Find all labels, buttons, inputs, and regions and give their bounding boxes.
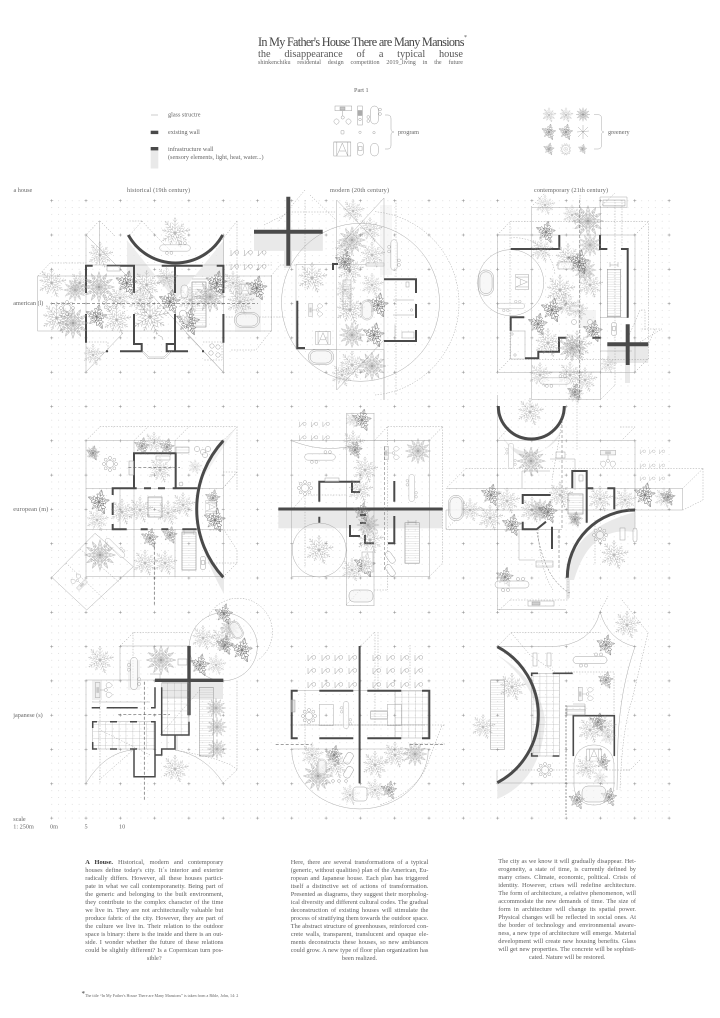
text column 1: the generic and belonging to the built environment, [85, 891, 223, 898]
plants [301, 742, 427, 805]
text column 2: The abstract structure of greenhouses, reinforced con- [291, 923, 428, 930]
central infrastructure wall [359, 646, 361, 783]
axis arrow [52, 302, 258, 304]
text column 3: form in architecture will change its spatial power. [498, 906, 636, 912]
plan: european modern [278, 408, 443, 605]
infrastructure shading [497, 655, 545, 799]
text column 3: identity. However, crises will redefine architecture. [498, 882, 636, 888]
plants [472, 611, 641, 810]
plan: american modern [254, 190, 459, 400]
scale: scale [13, 816, 26, 823]
text column 1: side. I wonder whether the future of these relations [85, 939, 223, 946]
plants [85, 432, 226, 576]
text column 3: ness, a new type of architecture will emerge. Material [498, 930, 636, 936]
axis line [559, 415, 562, 570]
text column 3: The form of architecture, a relative phenomenon, will [498, 890, 636, 896]
glass structure lines [86, 598, 272, 783]
furniture [478, 200, 625, 387]
column heading: historical: historical (19th century) [127, 187, 190, 194]
plants [527, 195, 617, 404]
furniture [60, 242, 260, 357]
scale: 1: 250m [13, 824, 34, 830]
cross infrastructure wall [254, 197, 323, 266]
text column 2: (generic, without qualities) plan of the American, Eu- [291, 867, 428, 874]
chairs [300, 422, 329, 440]
chairs [640, 450, 665, 481]
text column 3: accommodate the new demands of time. The size of [498, 898, 636, 904]
text column 3: erogeneity, a state of time, is currently defined by [498, 866, 636, 872]
background dot grid [50, 199, 671, 820]
arched wall [128, 235, 223, 263]
existing walls [297, 264, 416, 348]
text column 2: deconstruction of existing houses will stimulate the [291, 907, 428, 914]
legend: infrastructure wall [151, 146, 264, 168]
plants [459, 398, 676, 588]
footnote asterisk on title: * [464, 35, 467, 41]
plan: american historical [38, 218, 323, 372]
tile floors [93, 683, 189, 749]
axis arrows [118, 682, 170, 800]
glass structure lines [478, 193, 662, 400]
text column 1: produce fabric of the city. However, they are part of [85, 915, 223, 922]
existing walls [319, 481, 394, 543]
existing walls [523, 471, 614, 549]
glass structure lines [292, 413, 443, 605]
axis line [384, 447, 386, 570]
legend: glass structure: glass structre [168, 111, 201, 118]
plants [306, 408, 431, 582]
arched infrastructure wall [497, 647, 538, 783]
footnote: *The title “In My Father's House There are Many Mansions” is taken from a Bible, John, 14: 2 [82, 990, 238, 998]
text column 3: Physical changes will be reflected in social ones. At [498, 914, 636, 920]
row/column heading: a house: a house [14, 187, 32, 194]
competition line: shinkenchiku residental design competition 2019_living in the future [258, 60, 463, 66]
column heading: contemporary: contemporary (21th century) [534, 187, 608, 194]
text column 3: development will create new housing benefits. Glass [498, 938, 636, 944]
plan: japanese modern [276, 632, 445, 809]
furniture [291, 700, 387, 801]
plan: japanese contemporary [472, 596, 648, 815]
existing walls [92, 687, 189, 777]
text column 2: been realized. [342, 955, 377, 962]
row heading: japanese: japanese (s) [12, 712, 43, 719]
scale: 0m [50, 824, 58, 830]
existing walls [511, 235, 628, 358]
part label: Part 1 [354, 87, 369, 94]
text column 2 [290, 859, 428, 962]
plants [38, 218, 268, 366]
existing walls [532, 673, 614, 756]
axis line [579, 200, 581, 400]
infrastructure shading [278, 510, 443, 528]
text column 1: sible? [147, 955, 162, 962]
plan: japanese historical [86, 598, 272, 800]
text column 1: A House. Historical, modern and contemporary [85, 859, 223, 866]
furniture [69, 446, 216, 590]
existing walls [86, 266, 223, 351]
axis arrows [276, 743, 445, 745]
plants [87, 603, 253, 783]
glass structure lines [497, 596, 648, 805]
column heading: modern: modern (20th century) [330, 187, 389, 194]
text column 1: pate in what we call contemporaneity. Being part of [85, 883, 223, 890]
glass structure lines [52, 427, 237, 610]
text column 2: Presented as diagrams, they suggest their morpholog- [291, 891, 428, 898]
furniture [491, 653, 607, 802]
text column 1: the culture we live in. Their relation to the outdoor [85, 923, 223, 930]
infrastructure shading [92, 660, 223, 700]
row heading: european: european (m) [13, 506, 48, 513]
legend: infrastructure wall: infrastructure wall [168, 146, 214, 153]
plan: european historical [52, 427, 237, 610]
text column 2: ropean and Japanese house. Each plan has triggered [291, 875, 428, 882]
text column 2: Here, there are several transformations of a typical [291, 859, 428, 866]
text column 2: process of stratifying them towards the outdoor space. [291, 915, 428, 922]
text column 1: space is binary: there is the inside and there is an out- [85, 931, 223, 938]
subtitle: the disappearance of a typical house [258, 49, 463, 60]
scale [13, 816, 125, 830]
scale: 5 [84, 824, 88, 830]
text column 2: ical diversity and different cultural codes. The gradual [291, 899, 428, 906]
text column 2: could grow. A new type of floor plan organization has [291, 947, 428, 954]
infrastructure shading [127, 232, 323, 332]
legend [151, 111, 264, 168]
tile floor [395, 691, 428, 738]
greenery label: greenery [608, 129, 631, 136]
program label: program [398, 129, 419, 136]
text column 2: ments deconstructs these houses, so new ambiances [291, 939, 428, 946]
title block [258, 35, 464, 66]
plants [298, 199, 389, 387]
legend: program icons [334, 106, 394, 156]
axis line [565, 705, 567, 815]
chairs [308, 655, 423, 688]
text column 2: itself a distinctive set of actions of transformation. [291, 883, 428, 890]
text column 1 [85, 859, 224, 962]
text column 1: we live in. They are not architecturally valuable but [85, 907, 223, 914]
curved infrastructure wall [197, 441, 223, 577]
quarter arc wall [567, 510, 635, 578]
text column 3: cated. Nature will be restored. [529, 954, 605, 960]
glass structure lines [38, 221, 297, 372]
text column 2: crete walls, transparent, translucent and opaque ele- [291, 931, 428, 938]
infrastructure shading [498, 425, 635, 598]
legend: greenery icons [541, 108, 604, 156]
cross infrastructure wall [607, 324, 648, 365]
row heading: american: american (l) [13, 300, 43, 307]
greenery bracket [594, 115, 604, 149]
plan: european contemporary [446, 395, 703, 612]
cross infrastructure wall [155, 646, 223, 715]
scale: 10 [119, 824, 125, 830]
text column 3 [498, 858, 636, 960]
legend: infrastructure wall: (sensory elements, light, heat, water...) [168, 154, 264, 161]
furniture [448, 443, 637, 606]
text column 3: The city as we know it will gradually disappear. Het- [498, 858, 636, 864]
plan: american contemporary [478, 193, 662, 404]
infrastructure shading [578, 310, 648, 383]
column headings [14, 187, 608, 194]
existing walls [113, 453, 197, 529]
row headings [12, 300, 48, 719]
furniture [95, 619, 246, 756]
text column 3: will get new properties. The concrete will be sophisti- [498, 946, 636, 952]
furniture [298, 446, 419, 602]
text column 3: the border of technology and environmental aware- [498, 922, 636, 928]
existing walls [292, 691, 429, 738]
infrastructure shading [254, 205, 392, 275]
chairs [231, 250, 266, 270]
text column 1: they contribute to the complex character of the time [85, 899, 223, 906]
tile floor [532, 673, 559, 756]
glass structure lines [446, 395, 703, 612]
text column 3: many crises. Climate, economic, political. Crisis of [498, 874, 636, 880]
grid crosses [50, 199, 671, 820]
arched wall [498, 406, 564, 439]
glass structure lines [290, 632, 445, 809]
infrastructure shading [197, 428, 236, 594]
glass structure lines [264, 190, 459, 400]
main title: In My Father's House There are Many Mansions [258, 35, 464, 49]
bay window [142, 351, 172, 358]
legend: existing wall: existing wall [168, 129, 200, 136]
infrastructure wall [278, 508, 443, 510]
text column 1: could be slightly different? Is a Copernican turn pos- [85, 947, 223, 954]
furniture [308, 240, 414, 365]
text column 1: houses define today's city. It´s interior and exterior [85, 867, 223, 874]
axis arrows [128, 468, 180, 607]
text column 1: radically differs. However, all these houses partici- [85, 875, 223, 882]
program bracket [385, 115, 394, 149]
